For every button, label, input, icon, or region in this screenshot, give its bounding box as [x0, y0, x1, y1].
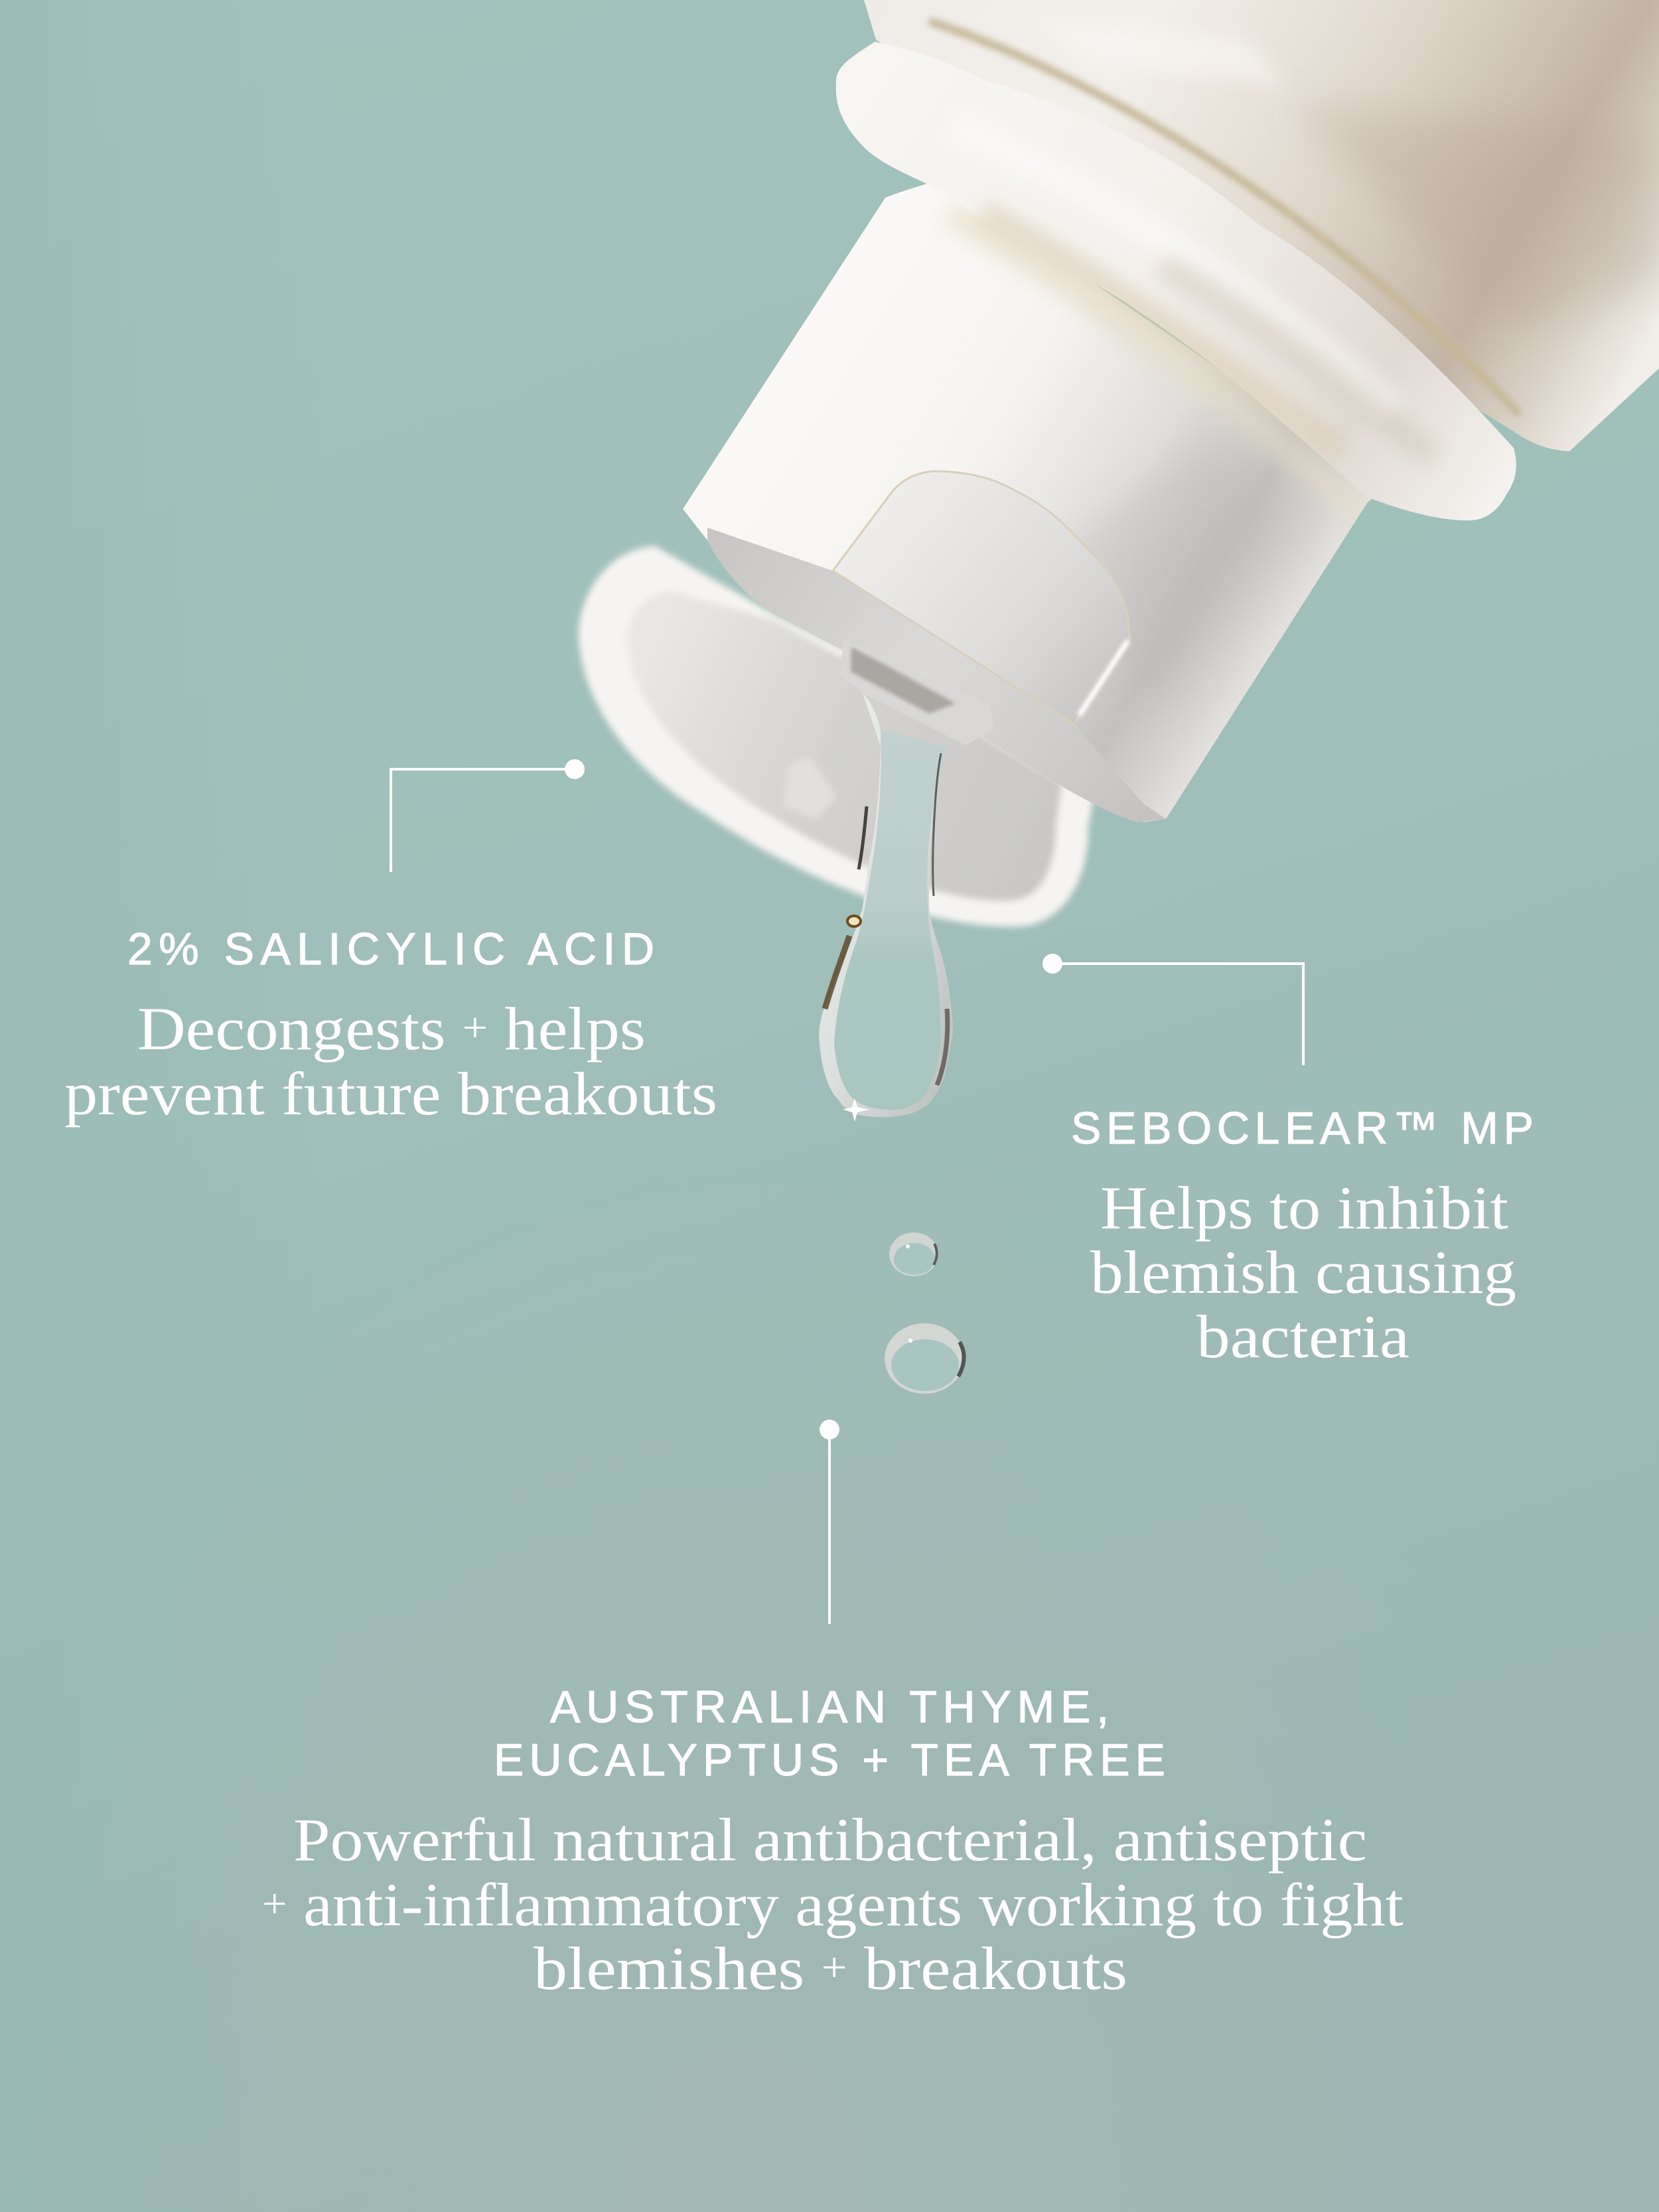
heading: botanicals	[494, 1682, 1165, 1785]
cap underside disk	[707, 528, 1166, 822]
drip outer wall	[819, 693, 953, 1117]
description: botanicals: +	[822, 1945, 847, 1990]
cap cylinder	[683, 179, 1387, 822]
callout: seboclear	[1071, 1103, 1534, 1370]
callout line: seboclear	[1043, 954, 1303, 1065]
description: salicylic acid: Decongests	[137, 995, 419, 1063]
cap shading	[942, 202, 1367, 607]
description: seboclear	[1090, 1174, 1516, 1370]
description: botanicals: +	[262, 1881, 287, 1927]
drip golden glint	[847, 916, 861, 926]
nozzle opening	[851, 647, 956, 713]
tube groove	[929, 21, 1520, 415]
drip clear interior	[834, 730, 948, 1110]
flip lid	[579, 546, 1095, 926]
description: salicylic acid: +	[463, 1005, 488, 1051]
description: salicylic acid: helps	[488, 995, 646, 1063]
drip dark reflections	[859, 806, 867, 869]
description: botanicals: breakouts	[847, 1935, 1127, 2002]
nozzle	[840, 638, 993, 745]
heading: salicylic acid: 2% SALICYLIC ACID	[127, 924, 654, 974]
callout line: salicylic acid	[391, 759, 585, 872]
heading: seboclear: SEBOCLEAR™ MP	[1071, 1103, 1534, 1153]
description: botanicals: anti-inflammatory agents working to fight	[287, 1871, 1404, 1939]
tube body shading	[1035, 20, 1659, 332]
collar ring	[836, 42, 1516, 520]
callout: botanicals	[262, 1682, 1404, 2002]
description: seboclear: bacteria	[1196, 1303, 1409, 1370]
heading: botanicals: AUSTRALIAN THYME,	[550, 1682, 1109, 1732]
heading: botanicals: EUCALYPTUS + TEA TREE	[494, 1735, 1165, 1785]
description: botanicals: Powerful natural antibacterial, antiseptic	[293, 1806, 1367, 1874]
small droplet	[889, 1232, 938, 1276]
description: salicylic acid: prevent future breakouts	[64, 1060, 717, 1128]
cap thumb notch	[833, 471, 1129, 724]
collar highlight and cream shadow	[956, 126, 1433, 458]
callout: salicylic acid	[64, 924, 717, 1128]
description: botanicals	[262, 1806, 1404, 2002]
description: salicylic acid	[64, 995, 717, 1128]
description: seboclear: Helps to inhibit	[1100, 1174, 1508, 1242]
description: seboclear: blemish causing	[1090, 1238, 1516, 1306]
notch gloss edge	[1079, 640, 1128, 715]
product: tube and cap	[579, 0, 1659, 926]
main serum drip	[819, 693, 953, 1122]
drip sparkle	[843, 1098, 869, 1122]
description: botanicals: blemishes	[534, 1935, 778, 2002]
tube body	[864, 0, 1659, 451]
callout line: botanicals	[820, 1420, 839, 1624]
large droplet	[885, 1323, 964, 1394]
